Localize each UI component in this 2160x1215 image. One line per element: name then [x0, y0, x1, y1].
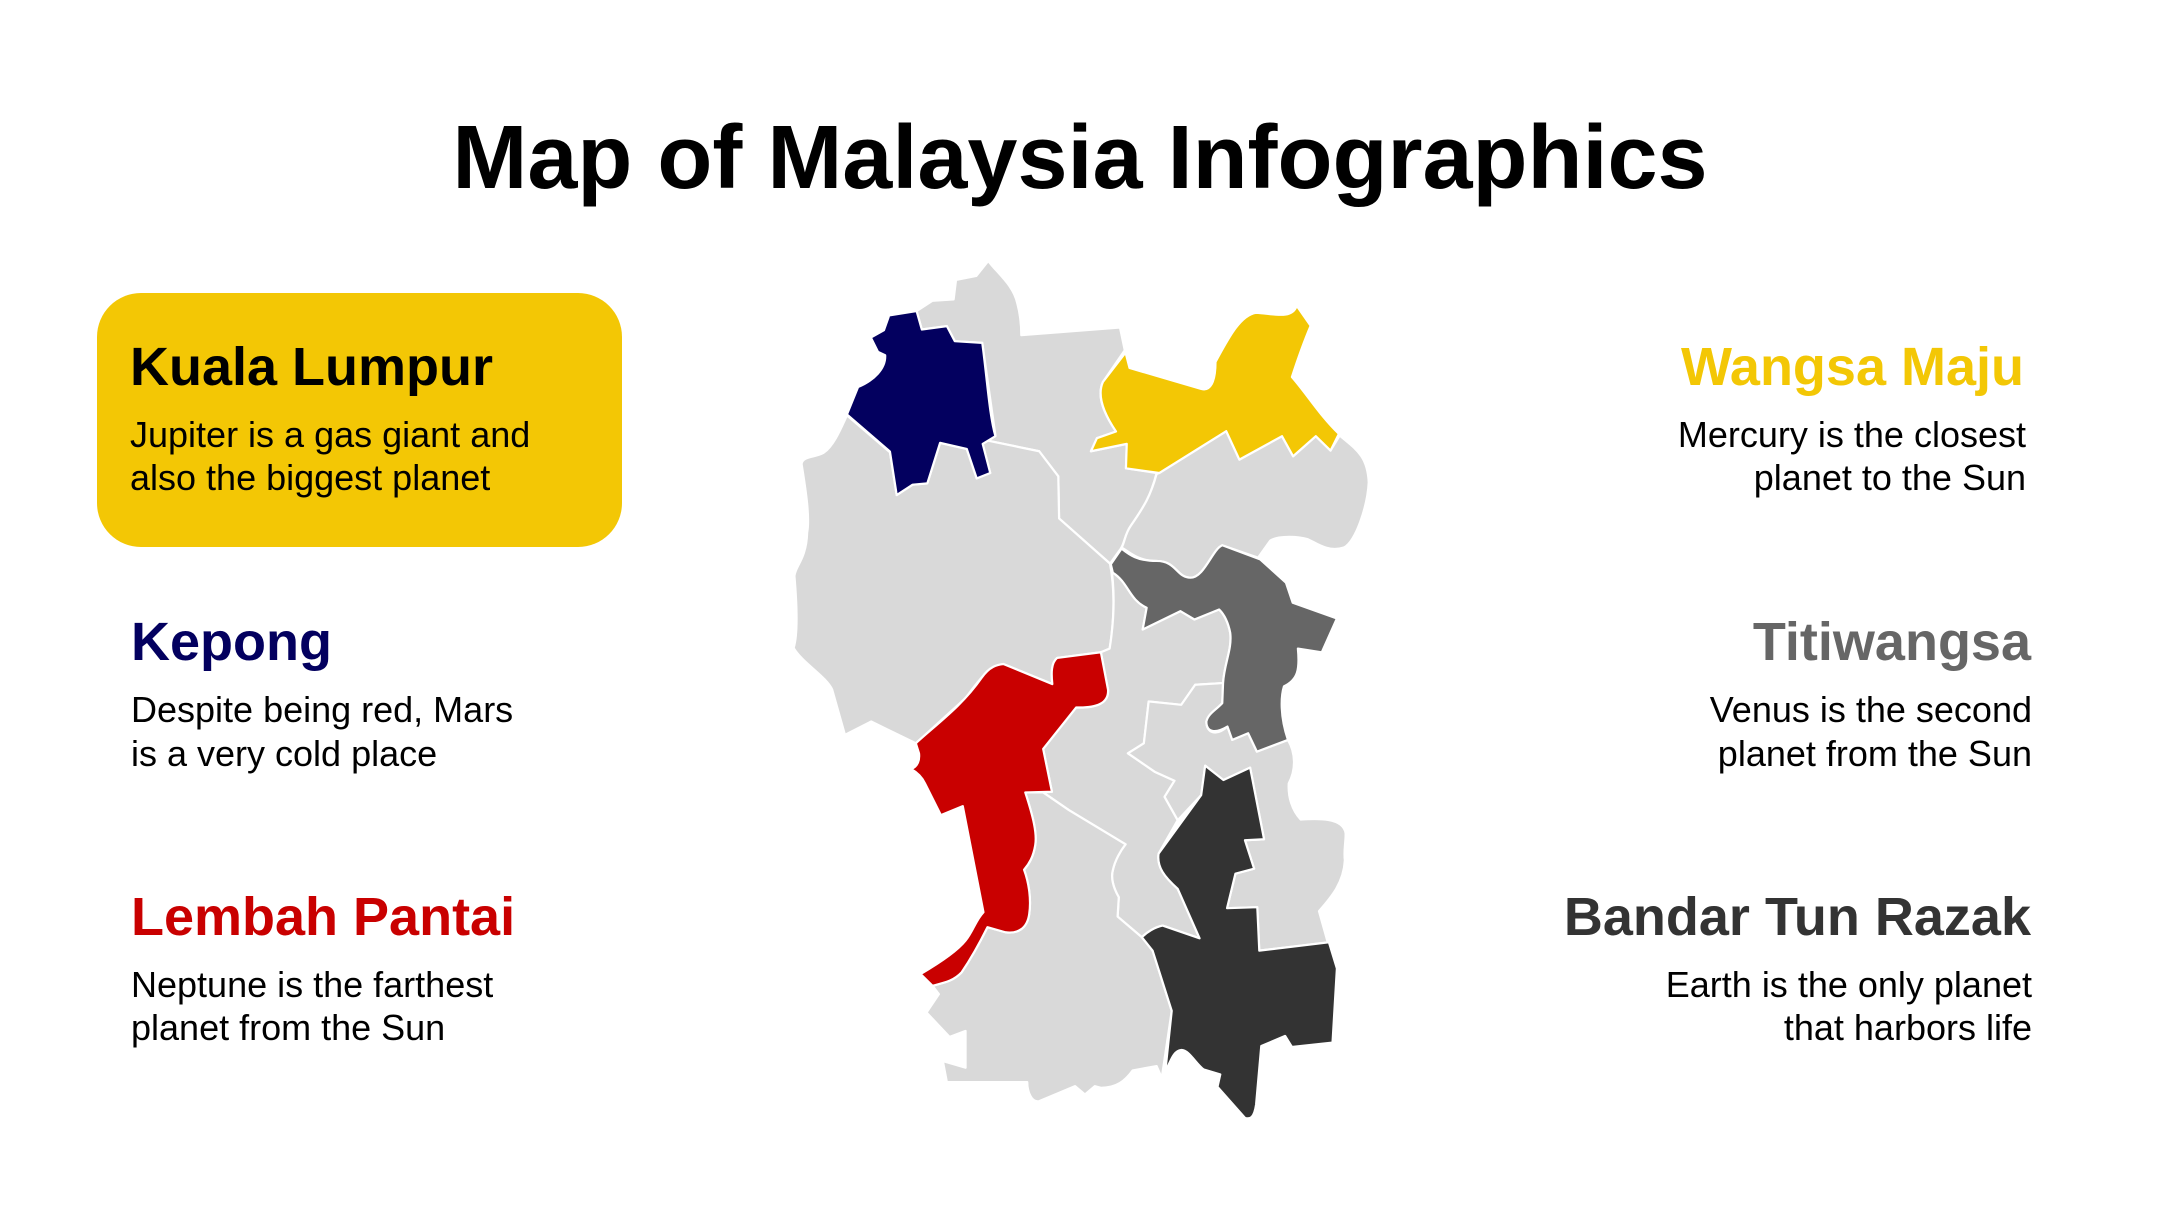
panel: Wangsa Maju [1678, 337, 2026, 498]
panel: Lembah Pantai [131, 887, 515, 1048]
text: Kepong description: Despite being red, Mars [131, 689, 513, 730]
text: Bandar Tun Razak description: that harbors life [1784, 1007, 2032, 1048]
text: Kuala Lumpur description: Jupiter is a gas giant and [130, 414, 530, 455]
text: Wangsa Maju description: planet to the Sun [1754, 457, 2026, 498]
region: central grey [1043, 564, 1231, 938]
highlight card [97, 293, 622, 547]
region: Wangsa Maju yellow [1091, 306, 1339, 473]
text: Kuala Lumpur description: also the biggest planet [130, 457, 490, 498]
panel: Kuala Lumpur [97, 293, 622, 547]
heading: Wangsa Maju: Wangsa Maju [1681, 337, 2024, 397]
region: south grey [927, 792, 1172, 1101]
region: east grey [1122, 431, 1369, 578]
region: Lembah Pantai red [911, 652, 1108, 986]
region: inner south-east grey [1128, 683, 1346, 951]
panel: Titiwangsa [1710, 612, 2032, 774]
text: Bandar Tun Razak description: Earth is the only planet [1666, 964, 2032, 1005]
map of Kuala Lumpur districts [794, 261, 1369, 1118]
region: west grey [794, 415, 1114, 743]
text: Titiwangsa description: planet from the Sun [1718, 733, 2032, 774]
text: Titiwangsa description: Venus is the second [1710, 689, 2032, 730]
heading: Titiwangsa: Titiwangsa [1753, 612, 2032, 672]
title: Map of Malaysia Infographics [452, 108, 1708, 208]
text: Wangsa Maju description: Mercury is the closest [1678, 414, 2026, 455]
panel: Kepong [131, 612, 513, 774]
heading: Kepong: Kepong [131, 612, 332, 672]
region: north grey [917, 261, 1157, 564]
region: Kepong navy [847, 311, 995, 495]
heading: Bandar Tun Razak: Bandar Tun Razak [1564, 887, 2032, 947]
heading: Lembah Pantai: Lembah Pantai [131, 887, 515, 947]
panel: Bandar Tun Razak [1564, 887, 2032, 1048]
region: Bandar Tun Razak charcoal [1142, 766, 1337, 1118]
text: Lembah Pantai description: Neptune is the farthest [131, 964, 493, 1005]
region: Titiwangsa grey [1111, 545, 1337, 752]
heading: Kuala Lumpur: Kuala Lumpur [130, 337, 493, 397]
text: Kepong description: is a very cold place [131, 733, 437, 774]
text: Lembah Pantai description: planet from the Sun [131, 1007, 445, 1048]
